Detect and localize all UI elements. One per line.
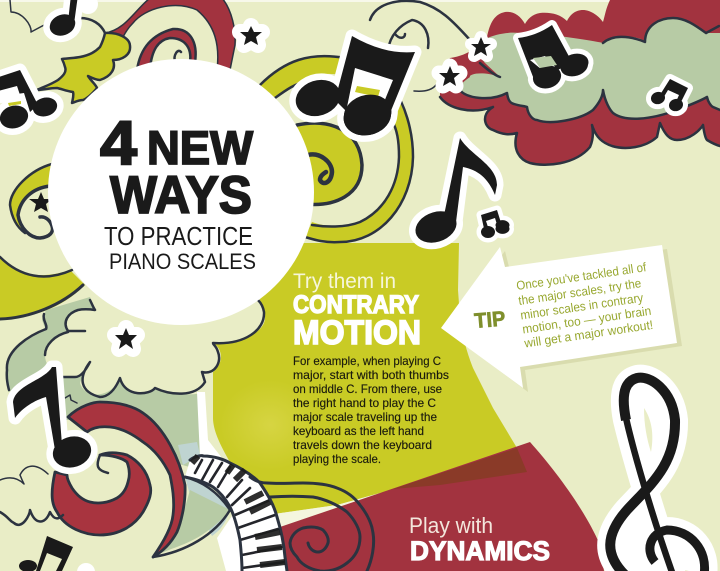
icon: small note right cloud (651, 79, 688, 111)
panel: yellow contrary motion background (213, 243, 530, 517)
graphic: big yellow spiral (260, 1, 470, 242)
graphic: left yellow spiral (0, 164, 85, 319)
text: contrary motion section: travels down the keyboard (293, 439, 432, 452)
icon: beamed note in cloud (518, 25, 589, 88)
text: contrary motion section: major, start with both thumbs (293, 369, 449, 382)
icon: star cloud lower (439, 66, 460, 86)
heading: title: TO PRACTICE (104, 221, 253, 251)
graphic: red and sage cloud top right (440, 0, 720, 165)
icon: beamed note left (0, 70, 57, 128)
heading: title: 4 (100, 109, 138, 178)
graphic: piano keyboard arc (185, 456, 287, 571)
circle: title background (48, 59, 314, 325)
heading: title: WAYS (110, 166, 252, 225)
heading: title: NEW (147, 121, 254, 174)
heading: title (100, 109, 256, 274)
panel: red dynamics background (255, 442, 604, 571)
callout: tip arrow: motion, too — your brain (521, 304, 652, 336)
text: contrary motion section: For example, when playing C (293, 355, 441, 368)
graphic: yellow cloud top left (10, 0, 130, 103)
text: dynamics section (409, 513, 550, 566)
icon: star cloud upper (471, 37, 491, 56)
icon: tiny beamed note (481, 210, 510, 238)
callout: tip arrow: TIP (473, 307, 506, 333)
callout: tip arrow: the major scales, try the (517, 276, 642, 308)
callout: tip arrow: Once you've tackled all of (515, 260, 648, 293)
graphic: red bass swirl (52, 402, 185, 557)
icon: bottom left note (19, 536, 95, 571)
callout: tip arrow: will get a major workout! (522, 318, 654, 351)
graphic: white strip under yellow panel (253, 493, 380, 540)
icon: left eighth note (13, 367, 91, 468)
icon: big beamed note (296, 36, 415, 135)
graphic: left cloud outline lower (0, 466, 48, 484)
icon: note top left (50, 0, 98, 36)
icon: single eighth note (415, 138, 497, 243)
graphic: white strips near piano (197, 392, 243, 571)
text: contrary motion section: Try them in (293, 270, 396, 293)
icon: treble clef (610, 378, 705, 571)
graphic: sage cloud lower left (7, 297, 264, 470)
icon: star left (29, 192, 52, 212)
text: contrary motion section: CONTRARY (293, 291, 419, 319)
text: dynamics section: Play with (409, 513, 493, 538)
callout: tip arrow: minor scales in contrary (519, 291, 645, 322)
graphic: top red swirl (105, 0, 235, 70)
icon: star top (240, 26, 262, 45)
callout: tip arrow (441, 245, 682, 392)
text: contrary motion section: MOTION (293, 314, 421, 352)
text: contrary motion section (293, 270, 449, 466)
icon: star lower left (115, 328, 137, 349)
heading: title: PIANO SCALES (109, 249, 256, 274)
text: contrary motion section: major scale traveling up the (293, 411, 437, 424)
overlap band (393, 448, 527, 489)
text: contrary motion section: the right hand to play the C (293, 397, 436, 410)
text: contrary motion section: on middle C. From there, use (293, 383, 442, 396)
text: contrary motion section: keyboard as the left hand (293, 425, 424, 438)
graphic: navy spiral line (250, 477, 374, 571)
text: dynamics section: DYNAMICS (410, 536, 550, 566)
graphic: blue wedge under bass swirl (185, 477, 230, 536)
text: contrary motion section: playing the scale. (293, 453, 381, 466)
